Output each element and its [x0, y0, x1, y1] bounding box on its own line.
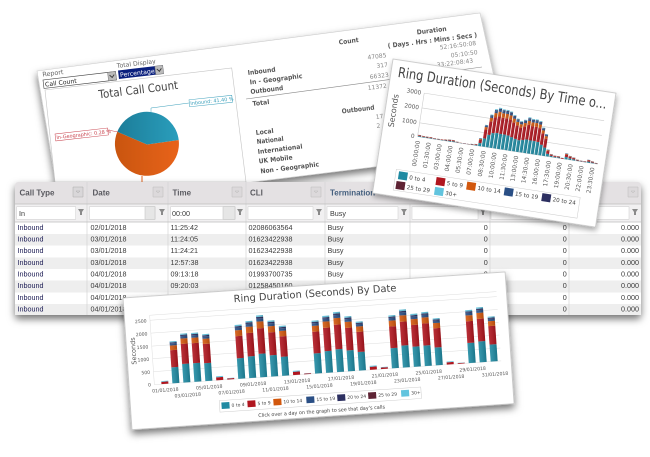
table rows: 0 [484, 258, 488, 267]
summary table labels: ( Days . Hrs : Mins : Secs ) [387, 31, 478, 50]
summary table labels [247, 25, 478, 175]
legend: 10 to 14 [477, 186, 501, 195]
summary table labels: Duration [416, 25, 447, 36]
x axis date labels: 01/01/2018 [152, 387, 179, 395]
table rows: 0 [563, 223, 567, 232]
y axis: 0 [148, 382, 151, 388]
report selector: Report [42, 68, 64, 79]
legend: 30+ [445, 191, 458, 199]
table rows: 11:24:05 [170, 234, 198, 244]
x axis labels: 23:30:00 [586, 167, 596, 194]
table rows: Busy [328, 270, 344, 278]
table rows: 0 [563, 258, 567, 267]
caption: Click over a day on the graph to see that day's calls [258, 404, 386, 419]
y axis: Seconds [129, 336, 139, 365]
table rows: 0 [484, 223, 488, 232]
legend: 5 to 9 [446, 181, 464, 190]
summary table values: 52:16:50:08 [439, 40, 477, 51]
x axis labels: 10:00:00 [489, 152, 499, 179]
table rows: 01623422938 [248, 258, 292, 267]
summary table labels: Outbound [341, 103, 375, 115]
table rows: 0 [563, 270, 567, 278]
table rows: 0.000 [621, 234, 639, 244]
table rows: Inbound [18, 304, 43, 314]
legend: 10 to 14 [283, 398, 303, 405]
legend: 0 to 4 [231, 402, 245, 409]
pie chart [115, 112, 179, 176]
table rows: 11:25:42 [170, 223, 198, 232]
table filter row: Busy [330, 209, 346, 218]
summary table labels: UK Mobile [258, 153, 293, 165]
y axis: Seconds [387, 93, 401, 128]
x axis date labels: 29/01/2018 [459, 366, 486, 374]
table rows: 03/01/2018 [90, 258, 126, 267]
x axis labels: 03:00:00 [434, 143, 444, 170]
table rows: 0.000 [621, 304, 639, 314]
summary table values: 47085 [367, 52, 387, 61]
table rows: 0.000 [621, 223, 639, 232]
chart title: Total Call Count [97, 78, 179, 102]
x axis date labels: 07/01/2018 [218, 389, 245, 397]
x axis labels [412, 140, 596, 194]
table filter row: In [19, 209, 25, 218]
table header row: Termination [330, 188, 375, 198]
y axis: 1000 [401, 118, 417, 126]
summary table labels: Local [255, 127, 274, 137]
total display selector [115, 58, 164, 79]
table header row: CLI [250, 188, 263, 198]
summary table values [367, 40, 478, 130]
table rows: 04/01/2018 [90, 281, 126, 290]
x axis labels: 11:30:00 [499, 153, 509, 180]
table rows: 0 [484, 270, 488, 278]
report selector [42, 68, 117, 89]
legend: 15 to 19 [514, 192, 539, 201]
total display selector: Total Display [115, 58, 157, 70]
table rows: 01993700735 [248, 270, 292, 278]
x axis date labels: 25/01/2018 [415, 369, 442, 377]
y axis: 500 [141, 370, 150, 376]
legend: 20 to 24 [347, 394, 366, 401]
x axis labels: 07:00:00 [466, 148, 476, 175]
table rows: 0.000 [621, 270, 639, 278]
table rows: Inbound [18, 270, 43, 278]
table rows: 0 [484, 246, 488, 255]
table rows: 01623422938 [248, 234, 292, 244]
y axis: 0 [410, 134, 415, 140]
stacked bars [418, 96, 604, 164]
summary table labels: Outbound [250, 84, 284, 96]
table rows: 0.000 [621, 258, 639, 267]
callout: outbound leader [141, 176, 143, 183]
summary table values: 05:10:50 [450, 49, 478, 59]
table rows: 0 [484, 234, 488, 244]
table rows: 0.000 [621, 293, 639, 302]
callout: in-geographic: In-Geographic: 0.28 % [56, 129, 112, 141]
total display selector: Percentage [120, 68, 155, 79]
callout: inbound: Inbound: 41.40 % [190, 96, 234, 107]
table filter row: 00:00 [172, 209, 190, 218]
x axis date labels: 09/01/2018 [240, 381, 267, 389]
panel: call count summary [37, 13, 510, 206]
callout: inbound [151, 95, 234, 113]
legend: 30+ [411, 390, 421, 397]
y axis: 2000 [404, 103, 420, 111]
x axis labels: 08:30:00 [478, 150, 488, 177]
table rows: 04/01/2018 [90, 304, 126, 314]
table rows: 09:20:03 [170, 281, 198, 290]
x axis date labels: 19/01/2018 [350, 380, 377, 388]
summary table labels: In - Geographic [249, 72, 303, 86]
x axis date labels: 05/01/2018 [196, 384, 223, 392]
chart title: Ring Duration (Seconds) By Time o... [397, 65, 608, 113]
legend: 25 to 29 [406, 185, 431, 195]
table rows: 01258450160 [248, 281, 292, 290]
x axis date labels: 17/01/2018 [328, 375, 354, 383]
summary table labels: International [257, 143, 303, 156]
panel: ring duration by date [123, 272, 514, 430]
table rows: Inbound [18, 293, 43, 302]
table rows: 0 [563, 281, 567, 290]
summary table labels: Count [338, 36, 359, 46]
table rows: Busy [328, 246, 344, 255]
panel: ring duration by time of day [372, 59, 616, 227]
table filter row [15, 204, 641, 222]
table rows: 04/01/2018 [90, 270, 126, 278]
x axis labels: 16:00:00 [532, 158, 542, 185]
x axis date labels: 03/01/2018 [174, 392, 201, 400]
y axis [127, 292, 501, 390]
summary table labels: National [256, 135, 284, 146]
x axis labels: 13:00:00 [510, 155, 520, 182]
x axis labels: 01:30:00 [423, 142, 433, 169]
table rows: 04/01/2018 [90, 293, 126, 302]
x axis labels: 22:00:00 [576, 165, 586, 192]
table rows: Inbound [18, 223, 43, 232]
report selector: Call Count [45, 78, 78, 89]
table rows: Inbound [18, 246, 43, 255]
legend: 0 to 4 [409, 175, 426, 184]
table rows: 03/01/2018 [90, 234, 126, 244]
x axis labels: 14:30:00 [521, 157, 531, 184]
legend: 20 to 24 [552, 197, 576, 207]
table rows: 0 [563, 293, 567, 302]
table header row: Call Type [20, 188, 55, 198]
summary table values: 11372 [367, 83, 387, 92]
table rows: 0.000 [621, 281, 639, 290]
legend: 15 to 19 [316, 396, 336, 403]
x axis date labels: 27/01/2018 [438, 374, 465, 382]
summary table values: 66323 [369, 72, 389, 81]
table rows: 12:57:38 [170, 258, 198, 267]
table rows: 11:24:21 [170, 246, 198, 255]
x axis date labels: 23/01/2018 [394, 377, 421, 385]
table rows: 0 [563, 234, 567, 244]
legend [393, 169, 580, 218]
y axis: 2000 [136, 331, 148, 338]
table header row: Time [172, 188, 192, 198]
table rows: 0 [563, 304, 567, 314]
x axis date labels: 21/01/2018 [371, 372, 398, 380]
y axis [385, 86, 604, 168]
table rows: Busy [328, 258, 344, 267]
pie chart frame [45, 68, 246, 182]
summary table values: 33:22:08:43 [436, 58, 474, 69]
x axis labels: 19:00:00 [554, 162, 564, 189]
summary table labels: Non - Geographic [260, 160, 320, 175]
x axis labels: 05:30:00 [456, 147, 465, 174]
summary table values: 2 [376, 123, 381, 130]
chart title: Ring Duration (Seconds) By Date [233, 283, 397, 305]
x axis date labels: 13/01/2018 [284, 378, 311, 386]
table rows: Busy [328, 223, 344, 232]
table rows: Inbound [18, 258, 43, 267]
x axis date labels: 31/01/2018 [482, 371, 509, 379]
table rows: 01623422938 [248, 246, 292, 255]
x axis labels: 17:30:00 [543, 160, 553, 187]
x axis date labels [152, 364, 509, 401]
stacked bars [157, 299, 498, 384]
summary table values: 317 [376, 62, 388, 70]
table header row: Date [92, 188, 110, 198]
table rows: Inbound [18, 281, 43, 290]
summary table values: 17 [375, 113, 384, 121]
table rows: Inbound [18, 234, 43, 244]
table rows: 0 [563, 246, 567, 255]
legend: 5 to 9 [257, 400, 271, 407]
legend: 25 to 29 [378, 392, 397, 399]
table rows: 02086063564 [248, 223, 292, 232]
x axis labels: 04:00:00 [445, 145, 455, 172]
panel: call data table [15, 182, 641, 315]
table rows: 09:13:18 [170, 270, 198, 278]
y axis: 2500 [135, 318, 147, 325]
table rows: Busy [328, 234, 344, 244]
table rows: 03/01/2018 [90, 246, 126, 255]
table rows: 0.000 [621, 246, 639, 255]
x axis labels: 00:00:00 [412, 140, 422, 167]
y axis: 1000 [137, 357, 150, 364]
table rows: 02/01/2018 [90, 223, 126, 232]
x axis date labels: 15/01/2018 [306, 383, 333, 391]
table rows [15, 182, 641, 315]
x axis date labels: 11/01/2018 [262, 386, 289, 394]
x axis labels: 20:30:00 [565, 163, 575, 190]
y axis: 3000 [406, 88, 422, 97]
summary table labels: Total [252, 98, 270, 108]
y axis: 1500 [137, 344, 149, 351]
summary table labels: Inbound [247, 66, 276, 77]
legend [219, 387, 422, 412]
table header row [15, 182, 641, 204]
